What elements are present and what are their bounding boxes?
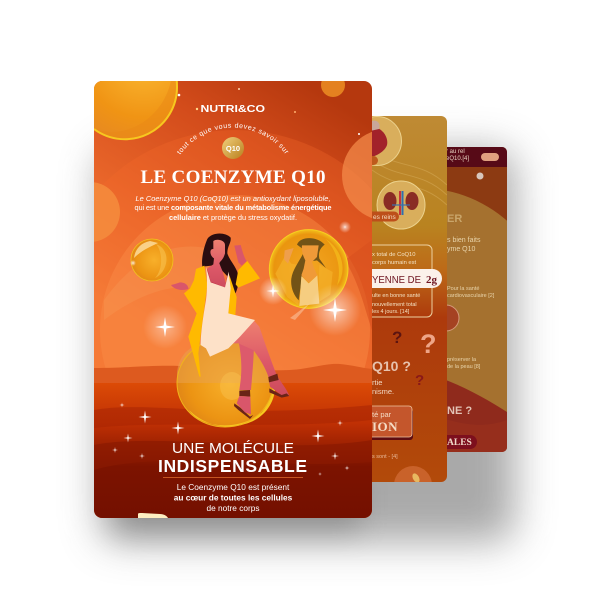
bubble: right with reflection [269,230,348,308]
white pill: 2g: YENNE DE [372,274,421,286]
band text: eQ10.[4] [446,156,469,162]
outlined info box [372,244,432,318]
sparkles [130,221,361,349]
back card [447,147,507,452]
bubble: under woman [177,339,275,427]
bubble: top left [94,81,178,140]
text fragment: nisme. [372,387,394,396]
front card [94,81,372,518]
label pill: heart [372,156,378,165]
text fragment: rtie [372,378,382,387]
white pill: 2g [372,269,442,288]
bubble: left [131,239,173,281]
button: té par [372,410,392,419]
back card: ALES [447,438,472,448]
intro text: Le Coenzyme Q10 (CoQ10) est un antioxydant liposoluble, [136,194,330,203]
text fragment [372,380,394,394]
title: LE COENZYME Q10 [140,167,326,188]
lower leg [238,340,254,390]
raised hand [234,245,247,266]
cardiovascular text [447,286,495,299]
heading: Q10: Q10 ? [372,358,411,374]
skin torso [207,240,227,290]
question marks: ? [392,328,402,347]
reflected hair [291,238,326,300]
reflected dress [299,275,319,306]
sandals [234,374,289,419]
intro text [134,194,332,222]
intro text: qui est une composante vitale du métabolisme énergétique [134,203,332,212]
pill label [447,435,477,449]
outlined info box: x total de CoQ10 [372,252,416,258]
hills [94,364,372,383]
closing text: Le Coenzyme Q10 est présent [177,482,290,492]
heading: une molécule: UNE MOLÉCULE [172,440,294,457]
badge: Q10: Q10 [226,144,240,153]
background [94,81,372,518]
reflected jacket [275,255,333,305]
band text [446,149,469,162]
dot [476,172,484,180]
badge: Q10 [222,137,244,159]
benefits text: yme Q10 [447,246,476,253]
reflected skin [301,245,319,283]
skin text: préserver la [447,357,477,363]
hair [202,234,239,297]
skin text: de la peau [8] [447,364,481,370]
cardiovascular text: cardiovasculaire [2] [447,293,495,299]
label: les reins [372,212,399,222]
stars [112,88,360,476]
bubble: top right [321,81,345,97]
question marks [392,332,435,385]
outlined info box: corps humain est [372,260,417,266]
chest shadow [207,268,230,293]
divider [163,476,303,479]
outlined info box: nouvellement total [372,302,417,308]
cardiovascular text: Pour la santé [447,286,479,292]
faded circle: left [94,182,120,242]
icon: heart [372,116,402,166]
label: les reins: es reins [373,214,397,221]
closing text [174,482,293,513]
top band [447,147,507,167]
icon: capsule [481,153,499,161]
logo: NUTRI&CO [200,103,265,115]
icon: kidneys [377,181,425,229]
icon circle [447,304,460,332]
benefits text [447,237,481,253]
reflected hand [284,248,294,264]
white pill: 2g: 2g [426,274,438,286]
benefits text: s bien faits [447,237,481,244]
band text: r au rel [446,149,465,155]
tan circle [447,190,507,412]
skin text [447,357,481,370]
heading: indispensable: INDISPENSABLE [158,456,307,476]
closing text: de notre corps [206,503,260,513]
closing text: au cœur de toutes les cellules [174,492,293,502]
outlined info box: ulte en bonne santé [372,293,420,299]
question marks: ? [420,329,436,359]
dress [201,267,255,357]
heading fragment: ER [447,213,462,225]
middle card [372,116,447,482]
button: ION [372,419,398,434]
arched subtitle: tout ce que vous devez savoir sur [177,122,288,154]
upper leg [228,320,289,397]
intro text: cellulaire et protège du stress oxydatif. [169,213,297,222]
footnote: s sont - [4] [372,454,398,460]
faded circle: right [342,132,372,218]
question fragment: NE ? [447,405,472,417]
question marks: ? [415,372,424,389]
cream shape [138,513,168,518]
drop shadow [100,150,515,542]
button [372,406,413,440]
left hand [171,282,188,290]
outlined info box: les 4 jours. [14] [372,309,410,315]
icon circle bottom [394,466,432,482]
jacket [184,261,260,377]
ground [94,383,372,518]
glow curves [179,130,372,250]
woman [171,234,289,419]
